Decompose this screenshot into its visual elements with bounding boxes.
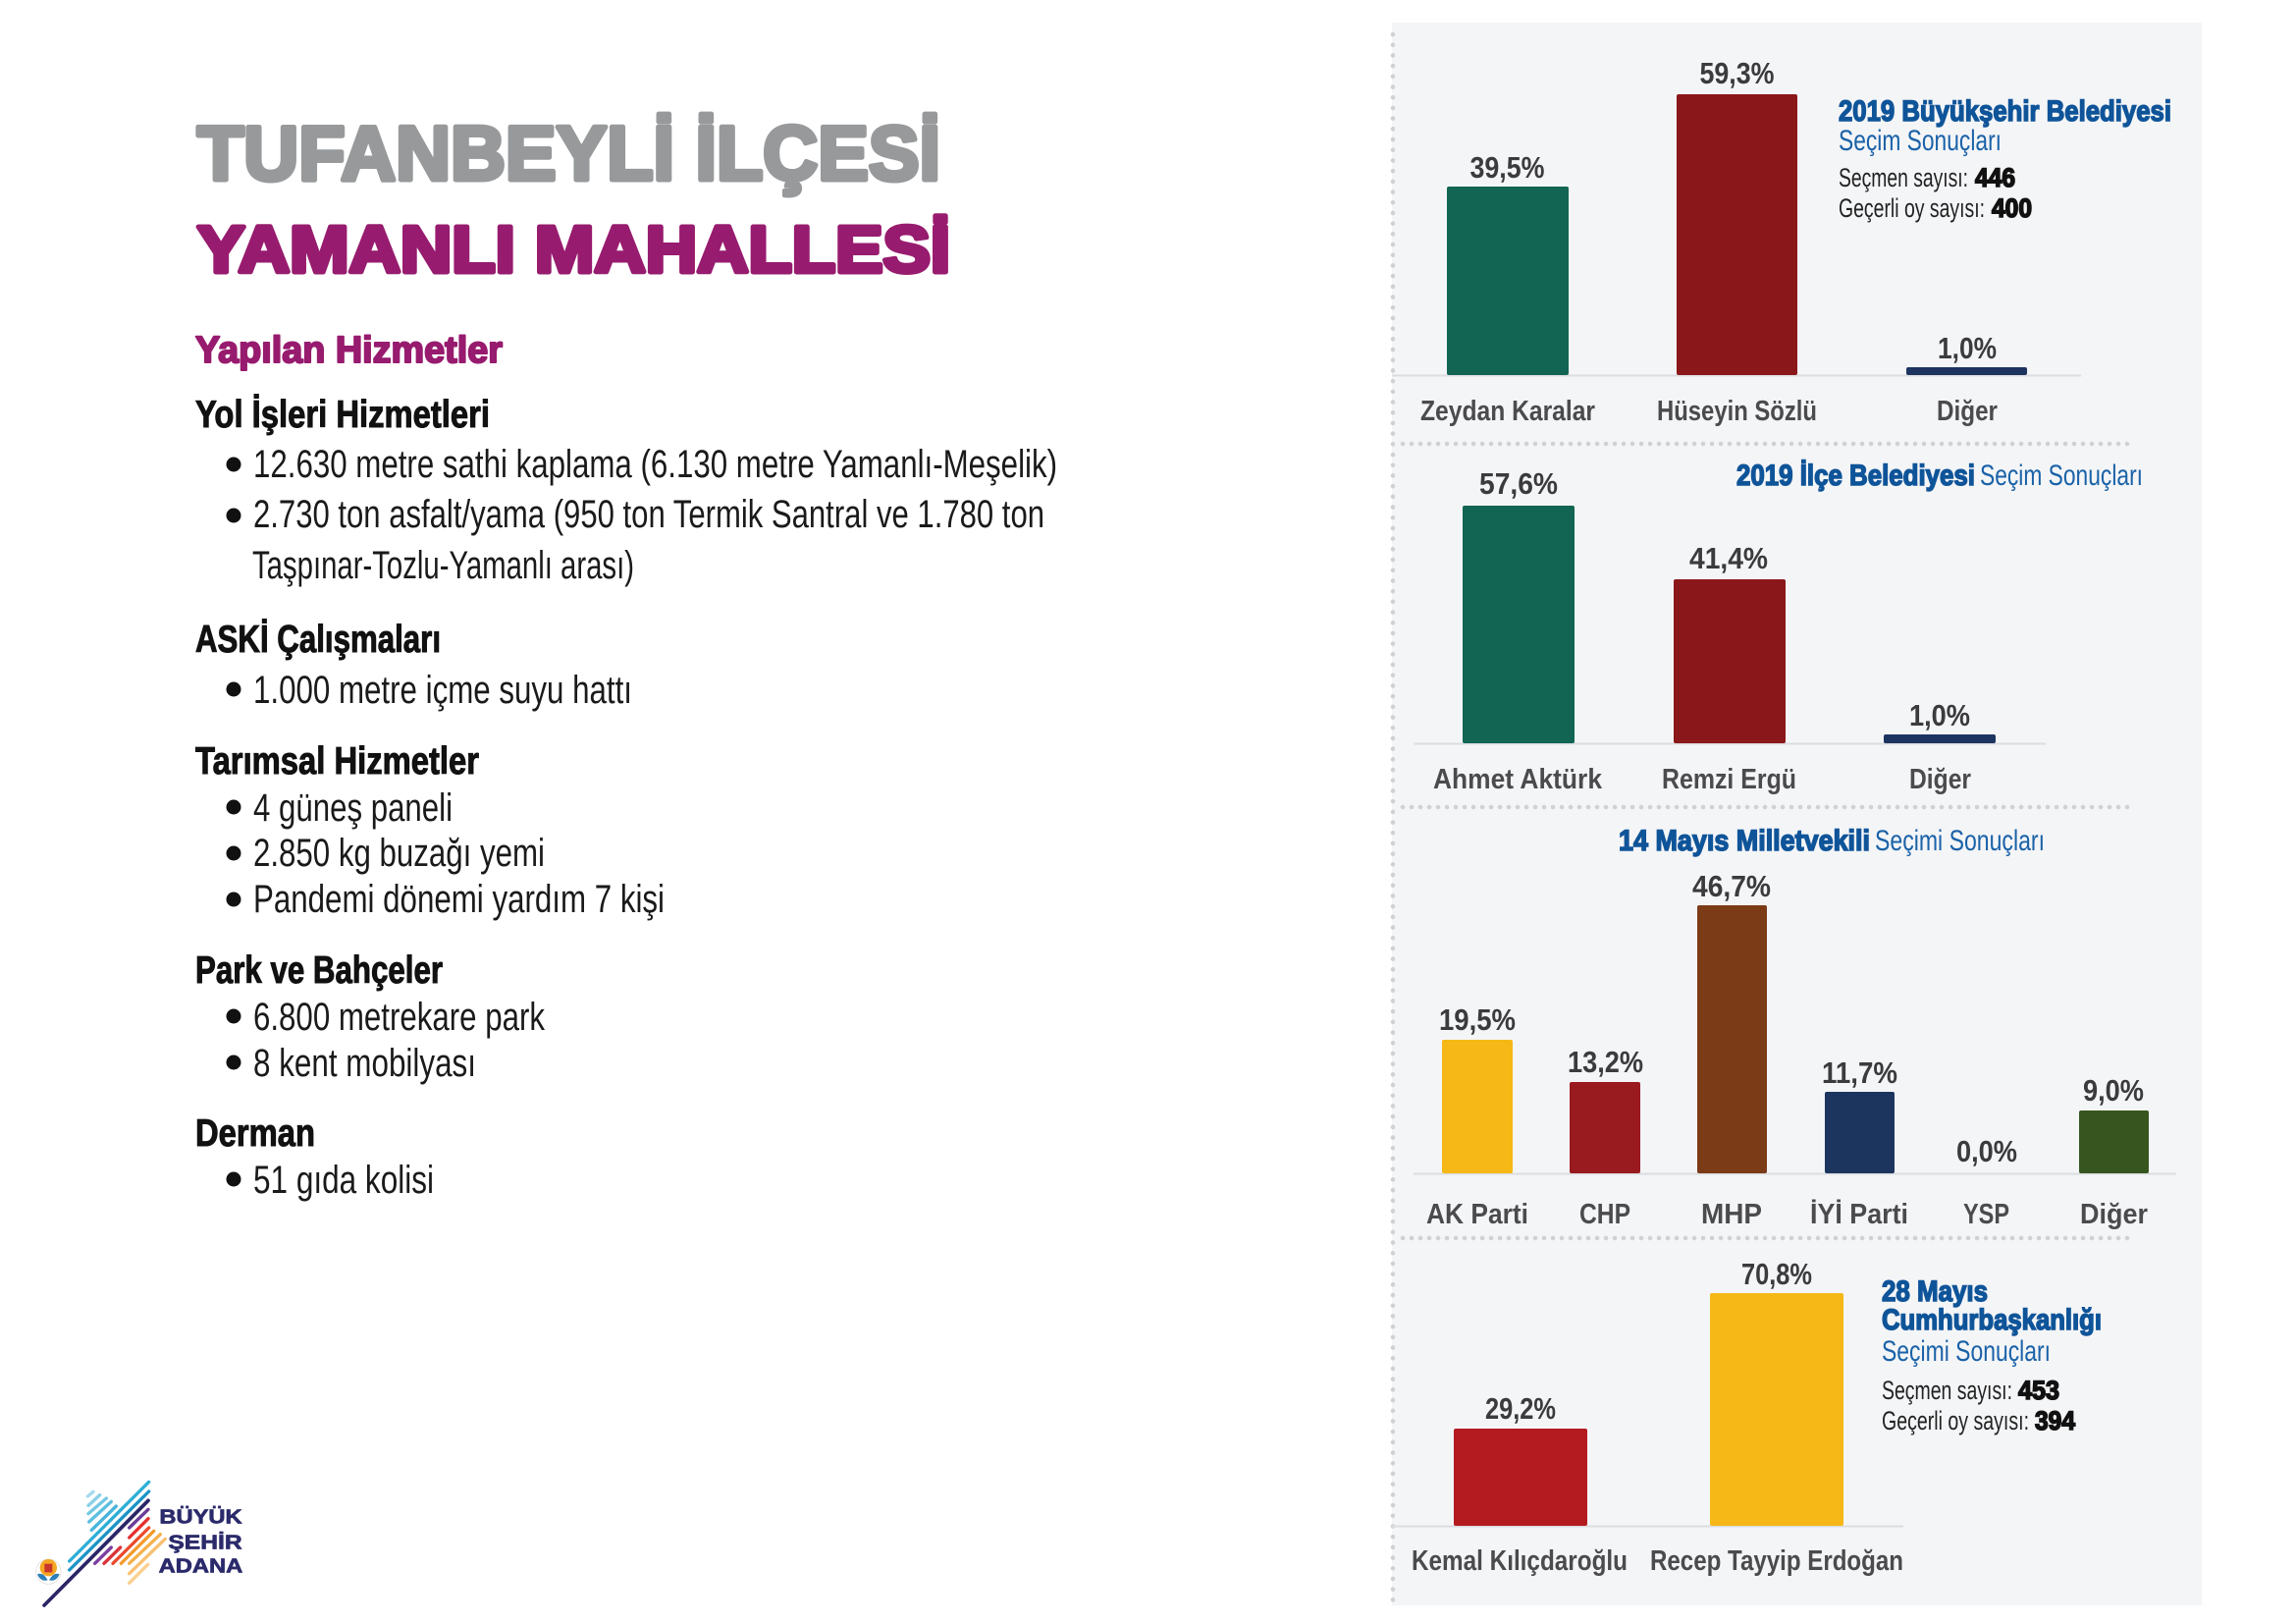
chart: 14 May parliamentary results: MHP xyxy=(1701,1199,1762,1230)
text block: parks and gardens: 6.800 metrekare park xyxy=(253,996,546,1039)
heading: 28 May presidential results with voter counts xyxy=(1882,1275,2102,1435)
heading: 28 May presidential results with voter counts: Seçimi Sonuçları xyxy=(1882,1335,2051,1368)
chart: 2019 metropolitan municipality results: 59,3% xyxy=(1700,56,1775,90)
text block: relief aid: Derman xyxy=(195,1112,315,1155)
chart: 14 May parliamentary results: 11,7% xyxy=(1822,1056,1897,1090)
heading: 2019 metropolitan results with voter counts: Seçmen sayısı: xyxy=(1839,163,1968,192)
chart: 2019 district municipality results: Ahmet Aktürk xyxy=(1433,764,1603,795)
chart: 2019 metropolitan municipality results: 1,0% xyxy=(1938,331,1997,365)
chart: 14 May parliamentary results: 19,5% xyxy=(1439,1002,1516,1037)
chart: 2019 district municipality results xyxy=(1414,466,2046,795)
text block: parks and gardens: Park ve Bahçeler xyxy=(195,949,443,992)
text block: agricultural services xyxy=(195,740,665,921)
title: district name: TUFANBEYLİ İLÇESİ xyxy=(197,110,940,196)
text block: relief aid: 51 gıda kolisi xyxy=(253,1159,434,1202)
chart: 2019 metropolitan municipality results: Zeydan Karalar xyxy=(1420,396,1595,427)
heading: 28 May presidential results with voter counts: 394 xyxy=(2035,1406,2075,1435)
logo wordmark xyxy=(159,1506,242,1578)
chart: 2019 district municipality results: Remzi Ergü xyxy=(1662,764,1796,795)
chart: 14 May parliamentary results: 46,7% xyxy=(1692,869,1771,903)
chart: 14 May parliamentary results: Diğer xyxy=(2080,1199,2148,1230)
heading: 28 May presidential results with voter counts: 28 Mayıs xyxy=(1882,1275,1988,1308)
chart: 28 May presidential results: Kemal Kılıçdaroğlu xyxy=(1412,1545,1628,1577)
text block: road works: 2.730 ton asfalt/yama (950 ton Termik Santral ve 1.780 ton xyxy=(253,493,1044,536)
text block: road works xyxy=(195,394,1057,587)
text block: agricultural services: 4 güneş paneli xyxy=(253,786,453,830)
text block: road works: 12.630 metre sathi kaplama (6.130 metre Yamanlı-Meşelik) xyxy=(253,443,1057,486)
chart: 2019 metropolitan municipality results xyxy=(1392,56,2081,427)
chart: 28 May presidential results: 29,2% xyxy=(1485,1391,1556,1426)
icon: municipal emblem xyxy=(36,1559,61,1584)
heading: 28 May presidential results with voter counts: Cumhurbaşkanlığı xyxy=(1882,1304,2102,1336)
heading: 2019 district results: 2019 İlçe Belediyesi xyxy=(1736,460,1975,492)
text block: agricultural services: Pandemi dönemi yardım 7 kişi xyxy=(253,878,665,921)
chart: 2019 district municipality results: 1,0% xyxy=(1909,698,1970,732)
chart: 14 May parliamentary results: İYİ Parti xyxy=(1810,1199,1908,1230)
text block: agricultural services: 2.850 kg buzağı yemi xyxy=(253,832,545,875)
chart: 14 May parliamentary results: AK Parti xyxy=(1426,1199,1528,1230)
chart: 14 May parliamentary results: CHP xyxy=(1579,1199,1630,1230)
heading: 2019 metropolitan results with voter counts: 400 xyxy=(1992,193,2032,223)
heading: 28 May presidential results with voter counts: Seçmen sayısı: xyxy=(1882,1376,2012,1405)
title: neighbourhood name: YAMANLI MAHALLESİ xyxy=(197,213,950,287)
logo: Büyükşehir Adana xyxy=(36,1482,242,1605)
text block: ASKİ works xyxy=(195,619,632,712)
heading: 2019 metropolitan results with voter counts: Seçim Sonuçları xyxy=(1839,125,2002,157)
text block: ASKİ works: ASKİ Çalışmaları xyxy=(195,619,441,661)
chart: 14 May parliamentary results: YSP xyxy=(1963,1199,2009,1230)
heading: 28 May presidential results with voter counts: 453 xyxy=(2018,1376,2059,1405)
heading: 2019 metropolitan results with voter counts: 2019 Büyükşehir Belediyesi xyxy=(1839,95,2171,128)
text block: parks and gardens xyxy=(195,949,546,1085)
logo wordmark: ADANA xyxy=(159,1556,242,1578)
heading: 2019 metropolitan results with voter counts: Geçerli oy sayısı: xyxy=(1839,193,1985,223)
chart: 2019 district municipality results: 57,6% xyxy=(1479,466,1558,501)
heading: 2019 metropolitan results with voter counts xyxy=(1839,95,2171,223)
text block: road works: Yol İşleri Hizmetleri xyxy=(195,394,490,436)
heading: 2019 district results: Seçim Sonuçları xyxy=(1980,460,2143,492)
chart: 14 May parliamentary results: 13,2% xyxy=(1568,1045,1643,1079)
text block: ASKİ works: 1.000 metre içme suyu hattı xyxy=(253,669,632,712)
chart: 2019 metropolitan municipality results: Hüseyin Sözlü xyxy=(1657,396,1817,427)
chart: 14 May parliamentary results: 9,0% xyxy=(2083,1073,2144,1108)
chart: 14 May parliamentary results xyxy=(1414,869,2176,1230)
logo wordmark: ŞEHİR xyxy=(168,1531,242,1553)
chart: 2019 district municipality results: Diğer xyxy=(1909,764,1971,795)
text block: road works: Taşpınar-Tozlu-Yamanlı arası) xyxy=(252,544,634,587)
chart: 28 May presidential results xyxy=(1392,1257,1903,1577)
heading: 28 May presidential results with voter counts: Geçerli oy sayısı: xyxy=(1882,1406,2029,1435)
text block: agricultural services: Tarımsal Hizmetler xyxy=(195,740,479,783)
heading: 2019 district results xyxy=(1736,460,2143,492)
logo wordmark: BÜYÜK xyxy=(159,1506,242,1529)
chart: 28 May presidential results: 70,8% xyxy=(1741,1257,1812,1291)
text block: relief aid xyxy=(195,1112,434,1202)
heading: 2019 metropolitan results with voter counts: 446 xyxy=(1975,163,2015,192)
chart: 14 May parliamentary results: 0,0% xyxy=(1956,1134,2017,1168)
heading: 14 May parliamentary results xyxy=(1619,825,2045,857)
panel: election results background xyxy=(1392,23,2202,1605)
heading: 14 May parliamentary results: 14 Mayıs Milletvekili xyxy=(1619,825,1870,857)
text block: parks and gardens: 8 kent mobilyası xyxy=(253,1042,476,1085)
heading: services done: Yapılan Hizmetler xyxy=(195,330,503,371)
chart: 2019 metropolitan municipality results: Diğer xyxy=(1937,396,1998,427)
heading: 14 May parliamentary results: Seçimi Sonuçları xyxy=(1875,825,2045,857)
chart: 28 May presidential results: Recep Tayyip Erdoğan xyxy=(1650,1545,1903,1577)
chart: 2019 district municipality results: 41,4% xyxy=(1689,541,1768,575)
chart: 2019 metropolitan municipality results: 39,5% xyxy=(1470,150,1545,185)
